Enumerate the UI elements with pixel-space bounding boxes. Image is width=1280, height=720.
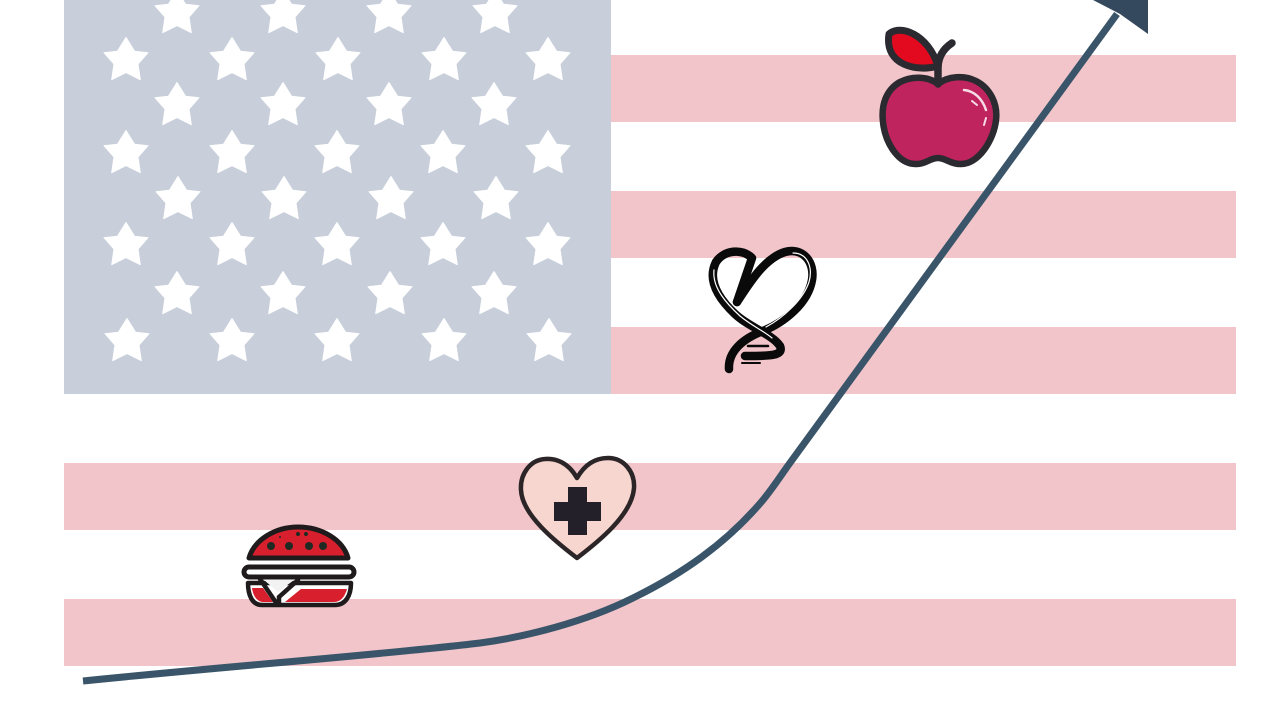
flag canton with stars: [64, 0, 611, 394]
flag stripes: [64, 55, 1236, 666]
icon: burger: [244, 527, 354, 605]
icon: apple: [883, 30, 996, 164]
icon: medical heart: [521, 458, 634, 558]
rising trend arrow: [83, 0, 1148, 681]
icon: DNA heart: [713, 251, 812, 369]
